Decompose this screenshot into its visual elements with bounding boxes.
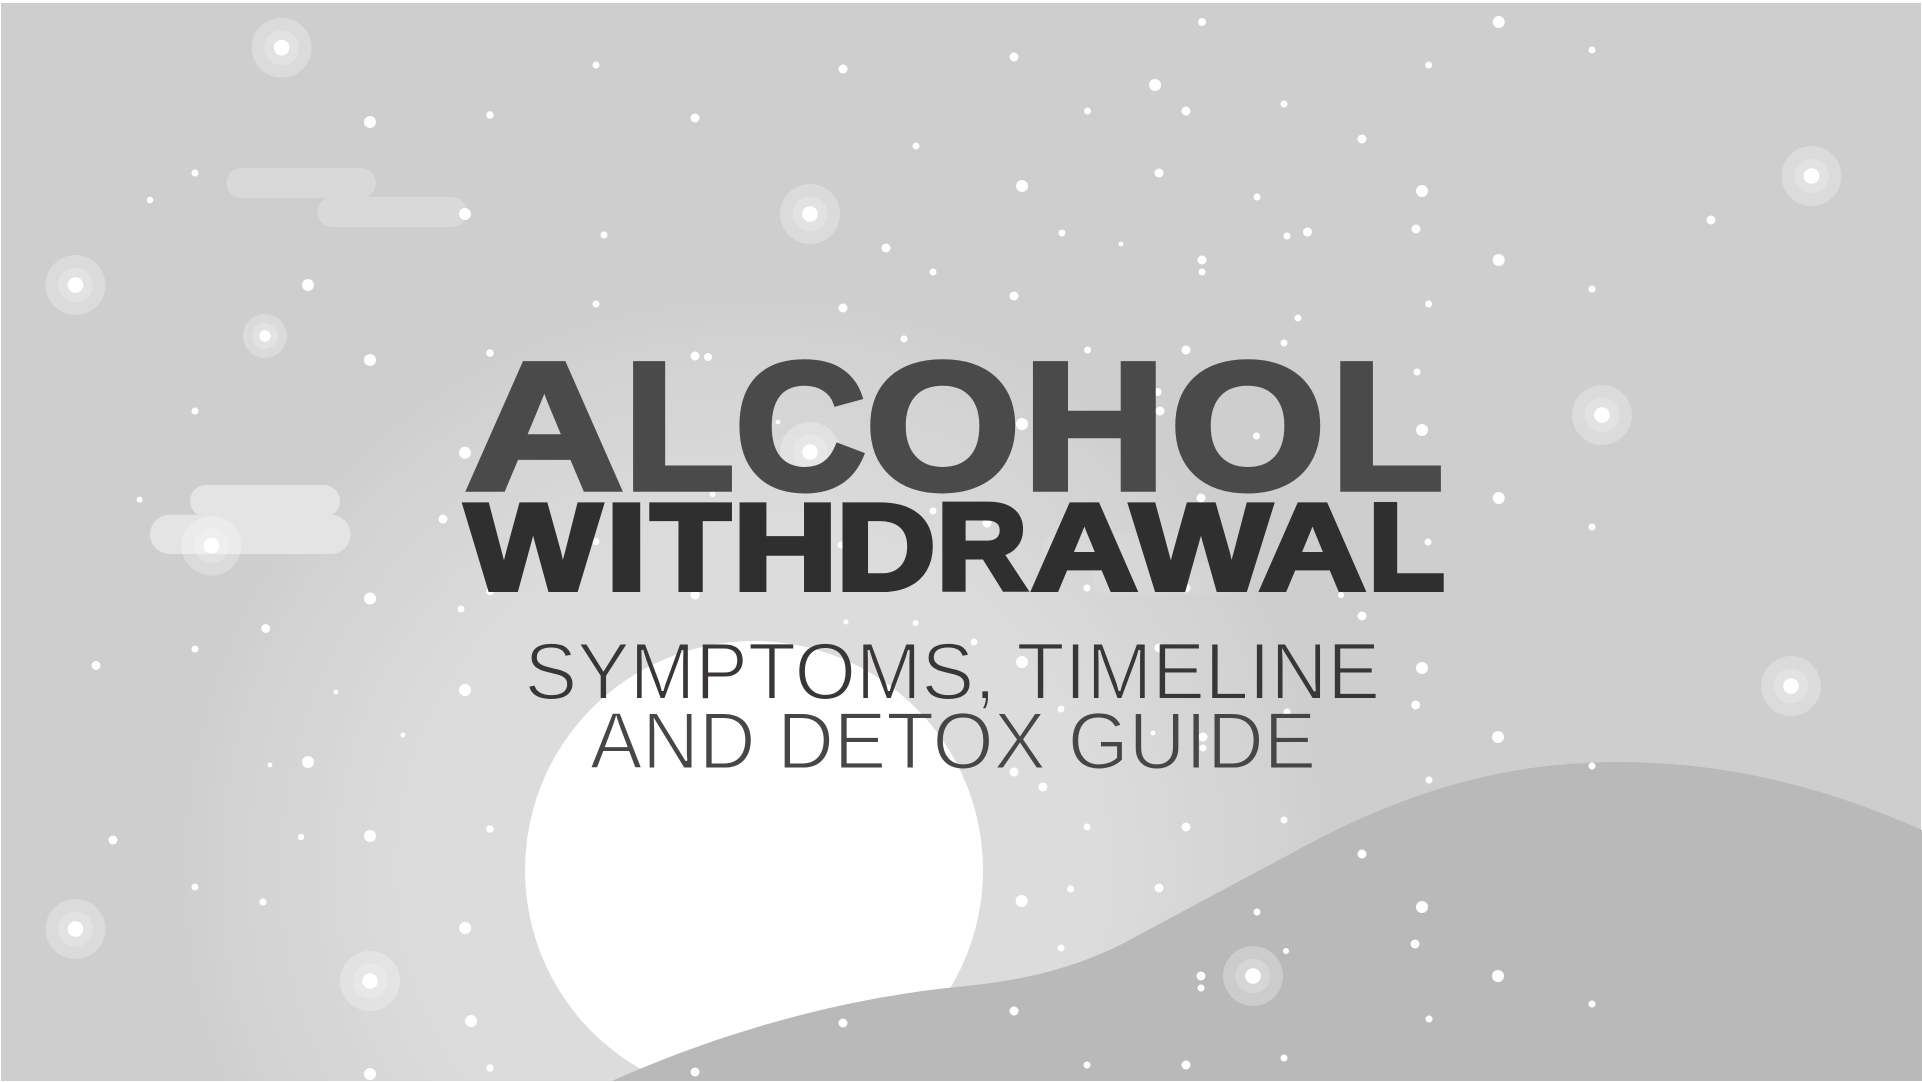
hill [612, 762, 1922, 1081]
title: WITHDRAWAL: I [606, 480, 647, 616]
title: WITHDRAWAL: W [465, 480, 601, 616]
title: ALCOHOL: O [865, 326, 1020, 528]
title: ALCOHOL: L [624, 326, 734, 528]
title: WITHDRAWAL: H [733, 480, 838, 616]
title: WITHDRAWAL: D [836, 480, 936, 616]
title: ALCOHOL: O [1170, 326, 1325, 528]
title: WITHDRAWAL: A [1259, 480, 1366, 616]
subtitle line 1: SYMPTOMS, TIMELINE [524, 627, 1380, 717]
title: WITHDRAWAL: A [1031, 480, 1138, 616]
title: ALCOHOL: L [1331, 326, 1444, 528]
title: WITHDRAWAL: T [650, 480, 731, 616]
upper clouds [226, 168, 467, 227]
subtitle line 2: AND DETOX GUIDE [590, 696, 1316, 786]
white sun [525, 641, 983, 1081]
title: WITHDRAWAL: W [1131, 480, 1271, 616]
title: WITHDRAWAL: R [936, 480, 1027, 616]
title: WITHDRAWAL: L [1368, 480, 1445, 616]
lower cloud [150, 485, 351, 554]
faint cloud behind the title [1043, 533, 1243, 595]
title: ALCOHOL: H [1023, 326, 1166, 528]
title: ALCOHOL: C [735, 326, 866, 528]
title: ALCOHOL: A [465, 326, 624, 528]
concentric sun glow [183, 299, 1325, 1081]
